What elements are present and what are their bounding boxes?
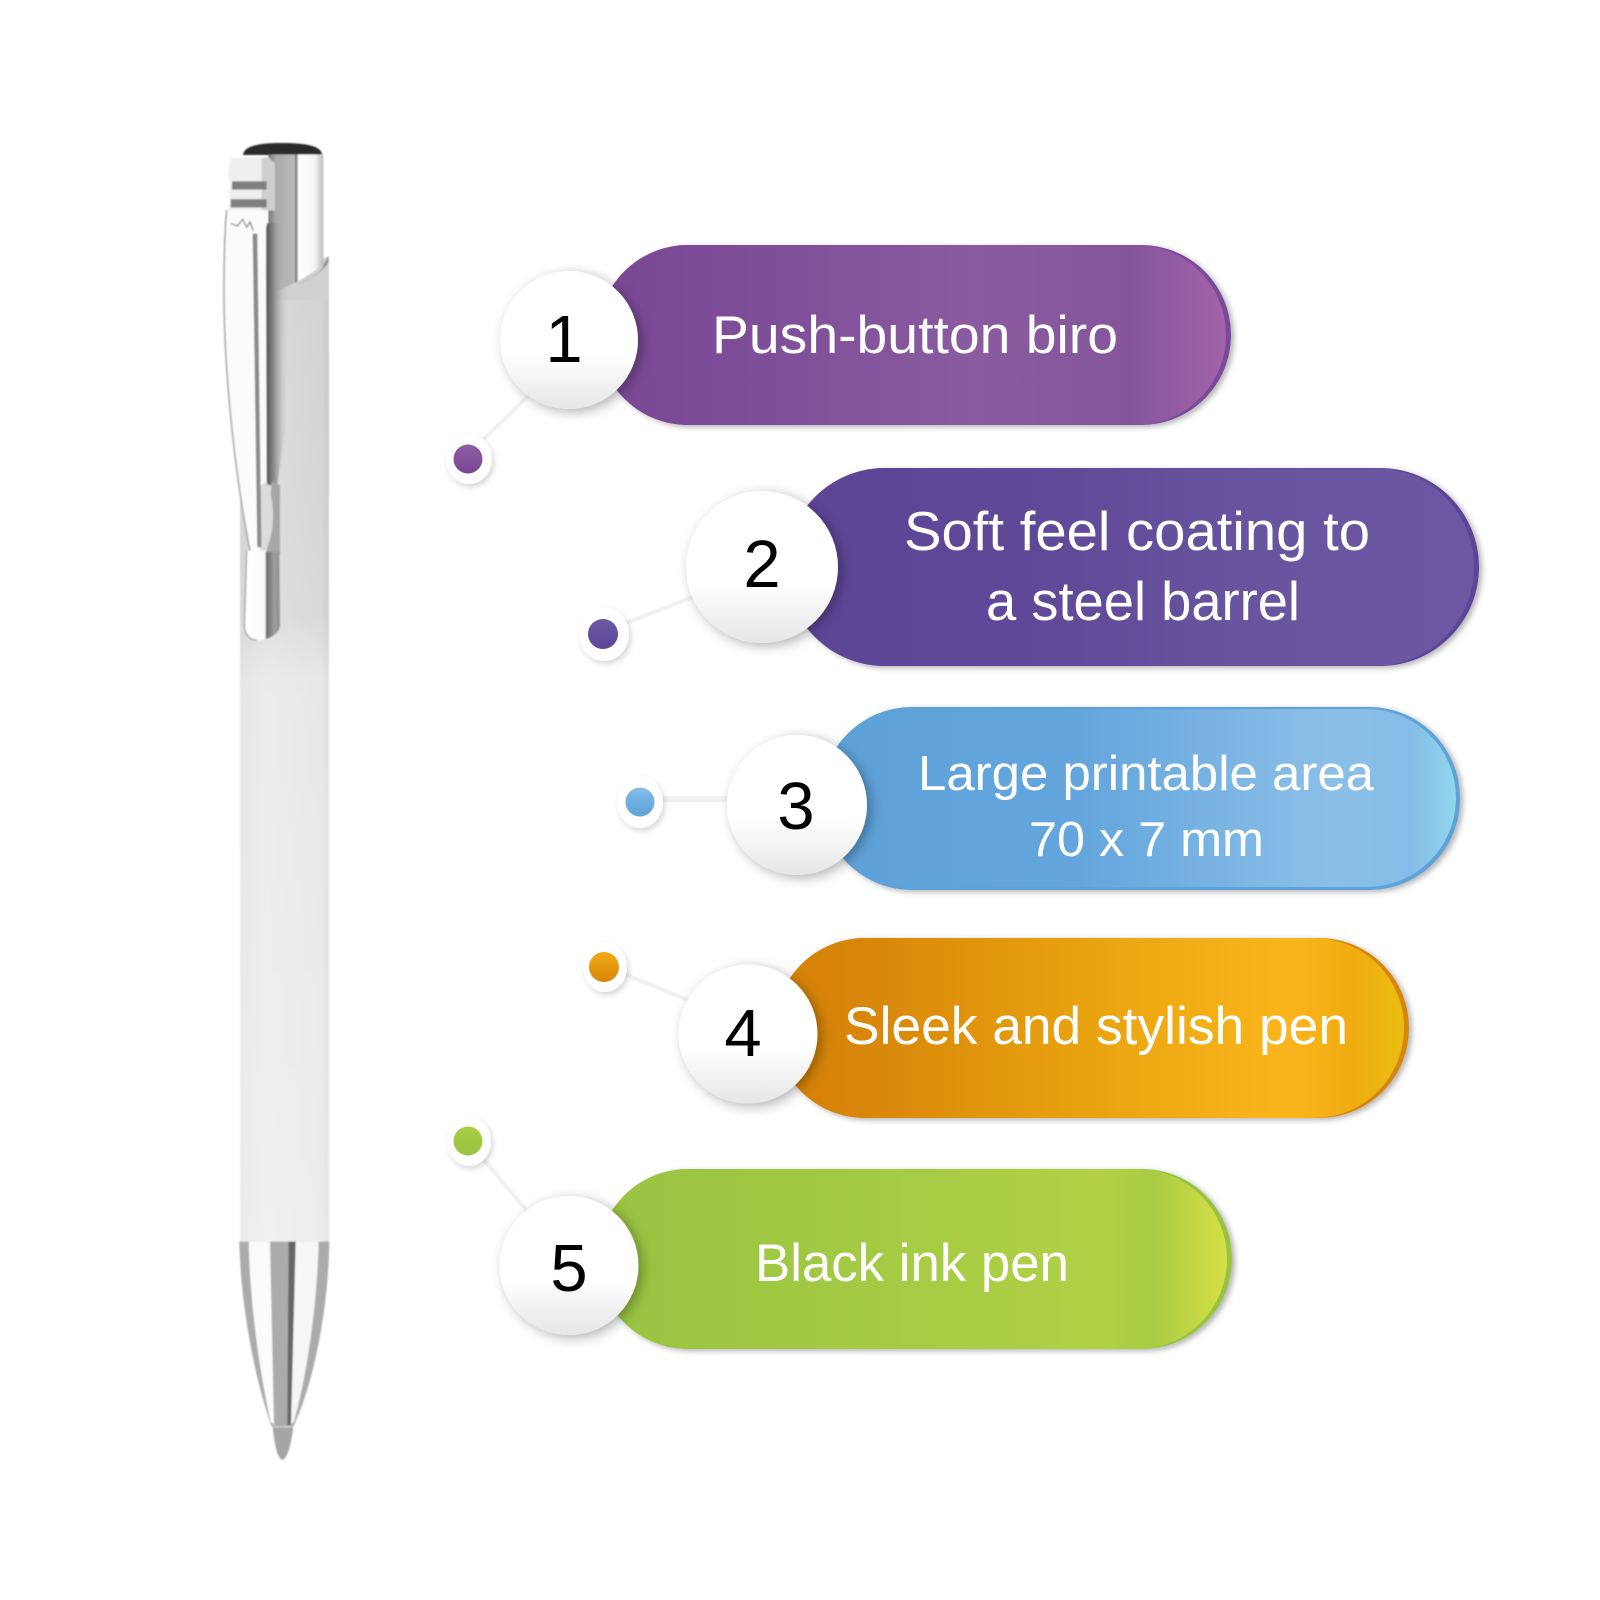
shadow behind clip bulge xyxy=(267,482,280,554)
tip ball point xyxy=(273,1427,293,1460)
pen illustration xyxy=(224,143,329,1460)
clip head right band xyxy=(262,157,275,210)
callout 3: Large printable area xyxy=(617,707,1460,890)
connector line 3 xyxy=(660,796,732,802)
clip ring top xyxy=(232,181,267,190)
clip bulge xyxy=(260,482,273,551)
connector line 4 xyxy=(622,973,688,1000)
label 2 line 2: a steel barrel xyxy=(986,570,1300,632)
number circle 2 xyxy=(686,491,838,643)
upper pen parts xyxy=(224,154,328,640)
number 3: 3 xyxy=(777,769,815,844)
number 1: 1 xyxy=(545,302,583,377)
number 2: 2 xyxy=(743,527,781,602)
label 2 line 1: Soft feel coating to xyxy=(904,500,1370,562)
pen metal tip xyxy=(239,1242,329,1460)
marker dot 4 xyxy=(583,942,627,992)
clip logo xyxy=(231,219,253,231)
collar edge xyxy=(297,256,328,285)
number circle 1 xyxy=(500,271,638,409)
number circle 5 xyxy=(500,1196,638,1335)
callout 1: Push-button biro xyxy=(446,245,1231,484)
label 1: Push-button biro xyxy=(712,306,1118,365)
label 5: Black ink pen xyxy=(755,1234,1069,1293)
marker dot 3 xyxy=(617,776,663,828)
pill 5 xyxy=(598,1169,1232,1349)
number 4: 4 xyxy=(724,996,762,1071)
tip body xyxy=(239,1242,329,1427)
label 3 line 2: 70 x 7 mm xyxy=(1029,813,1264,867)
clip tab outline xyxy=(244,551,257,640)
connector line 2 xyxy=(626,596,696,623)
tip centre dark line xyxy=(287,1242,296,1425)
callout 4: Sleek and stylish pen xyxy=(583,938,1409,1118)
pill 3 xyxy=(821,707,1460,890)
tip left highlight xyxy=(249,1242,274,1425)
clip groove xyxy=(253,234,261,547)
label 4: Sleek and stylish pen xyxy=(844,997,1348,1056)
connector line 5 xyxy=(484,1160,528,1212)
pen push button xyxy=(243,143,322,155)
marker dot 1 xyxy=(446,434,492,484)
pill 1 xyxy=(598,245,1231,425)
clip body xyxy=(224,210,272,552)
callout 2: Soft feel coating xyxy=(579,468,1479,666)
clip head xyxy=(227,157,275,210)
clip lower tab xyxy=(244,551,280,640)
marker dot 5 xyxy=(447,1116,491,1166)
connector line 1 xyxy=(483,396,528,440)
label 3 line 1: Large printable area xyxy=(918,747,1375,801)
callout 5: Black ink pen xyxy=(447,1116,1232,1349)
clip outline xyxy=(224,210,250,551)
number circle 4 xyxy=(678,964,818,1104)
clip ring bottom xyxy=(231,199,267,208)
tip right highlight xyxy=(291,1242,319,1425)
number 5: 5 xyxy=(550,1231,588,1306)
chrome top section xyxy=(268,154,323,293)
number circle 3 xyxy=(727,735,867,875)
pill 4 xyxy=(775,938,1409,1118)
pill 2 xyxy=(786,468,1479,666)
barrel horizontal sheen xyxy=(240,300,329,1242)
clip shadow on barrel xyxy=(266,223,287,485)
marker dot 2 xyxy=(579,607,629,661)
pen barrel xyxy=(240,256,329,1242)
